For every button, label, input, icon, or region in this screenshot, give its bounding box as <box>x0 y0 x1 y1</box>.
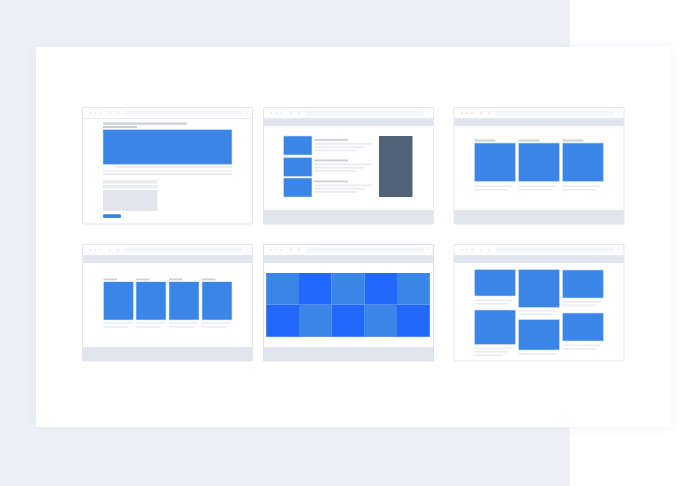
wireframe: article page <box>82 108 252 224</box>
wireframe: media list with sidebar <box>264 108 434 224</box>
wireframe: checkerboard grid <box>264 244 434 361</box>
wireframe: three columns <box>454 108 624 224</box>
wireframe: masonry <box>454 244 624 361</box>
main white panel <box>36 47 671 427</box>
wireframe: four columns <box>82 244 252 361</box>
